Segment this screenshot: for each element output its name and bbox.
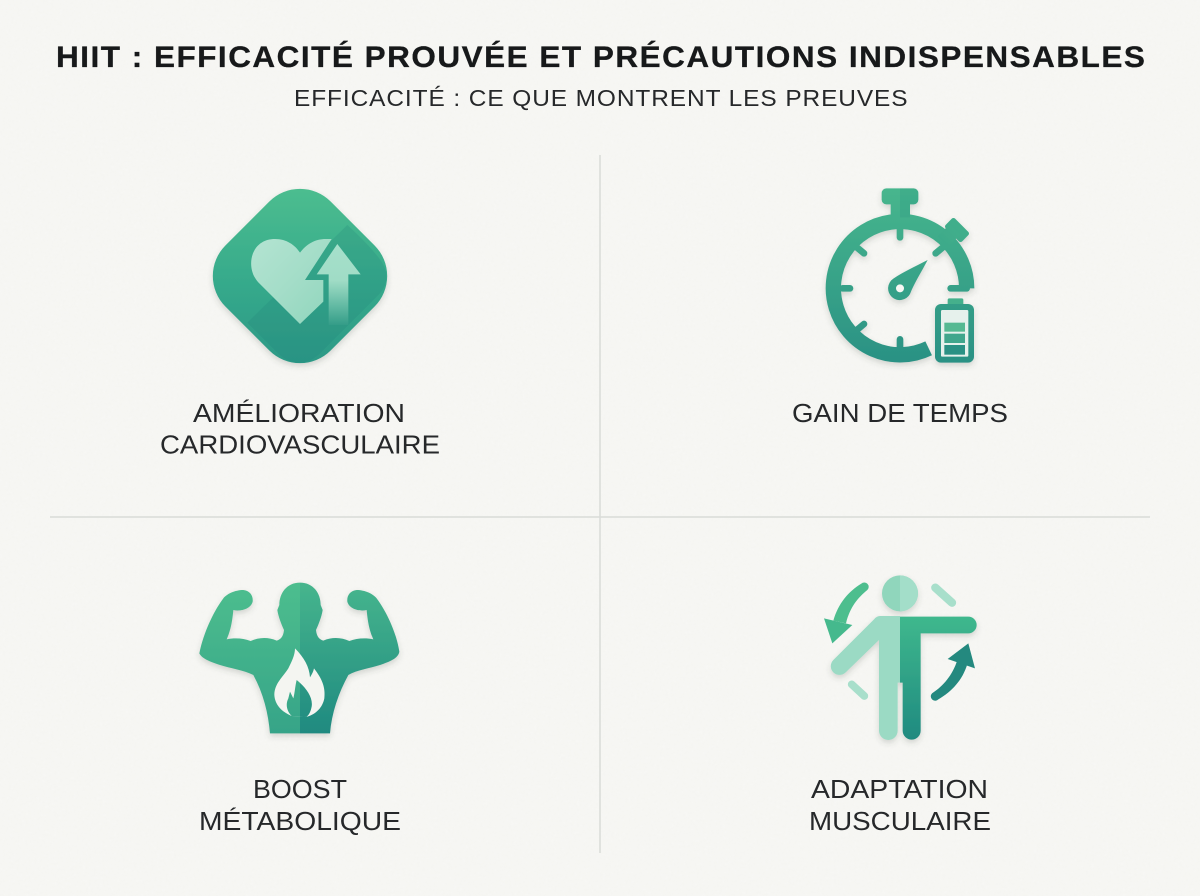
icon: figure with rotating arrows bbox=[824, 575, 977, 740]
panel: gain de temps bbox=[792, 188, 1008, 428]
panel: amélioration cardiovasculaire bbox=[160, 171, 440, 460]
label: amélioration cardiovasculaire: AMÉLIORATION bbox=[193, 399, 405, 428]
title: HIIT : EFFICACITÉ PROUVÉE ET PRÉCAUTIONS INDISPENSABLES bbox=[56, 40, 1145, 74]
label: boost métabolique: MÉTABOLIQUE bbox=[199, 807, 401, 836]
label: gain de temps: GAIN DE TEMPS bbox=[792, 400, 1008, 428]
label: adaptation musculaire: MUSCULAIRE bbox=[809, 808, 991, 836]
panel: boost métabolique bbox=[199, 583, 401, 836]
subtitle: EFFICACITÉ : CE QUE MONTRENT LES PREUVES bbox=[294, 85, 908, 112]
icon: heart and up arrow in rounded diamond bbox=[195, 171, 405, 381]
icon: flexing torso with flame bbox=[199, 583, 399, 733]
label: amélioration cardiovasculaire: CARDIOVASCULAIRE bbox=[160, 432, 440, 460]
label: adaptation musculaire: ADAPTATION bbox=[811, 776, 988, 804]
label: adaptation musculaire bbox=[809, 776, 991, 836]
label: boost métabolique bbox=[199, 776, 401, 836]
label: amélioration cardiovasculaire bbox=[160, 399, 440, 460]
label: boost métabolique: BOOST bbox=[253, 776, 347, 804]
panel: adaptation musculaire bbox=[809, 575, 991, 836]
icon: stopwatch with battery bbox=[833, 188, 974, 363]
